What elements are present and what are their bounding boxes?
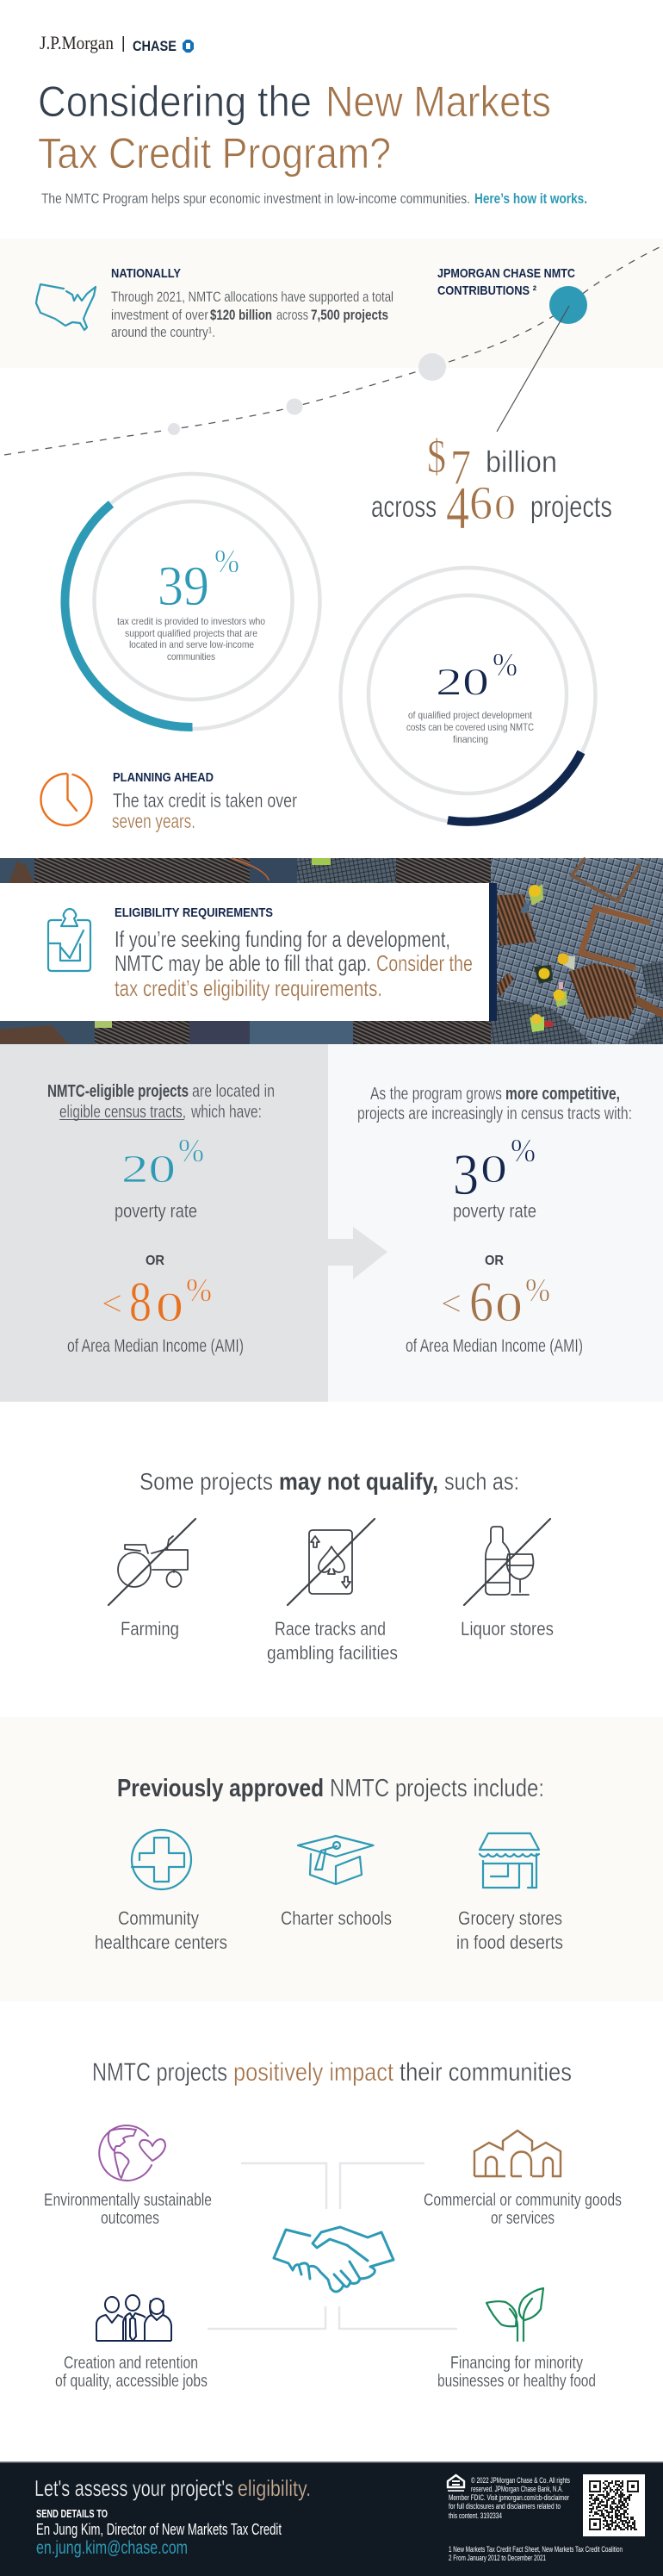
- item: financing for minority businesses: Financing for minority: [450, 2354, 583, 2373]
- item: race tracks and gambling: Race tracks and: [275, 1618, 386, 1640]
- text: legal disclaimer: this content. 3192334: [449, 2511, 502, 2521]
- text: eligible intro: eligible census tracts,: [59, 1103, 186, 1122]
- panel: NMTC-eligible projects: [0, 1044, 328, 1402]
- pointer line: [497, 306, 569, 432]
- logo: J.P.Morgan and Chase: CHASE: [133, 38, 177, 54]
- text: contact details: en.jung.kim@chase.com: [36, 2538, 188, 2558]
- text: nationally: Through 2021, NMTC allocations have supported a total: [111, 289, 393, 305]
- item: financing for minority businesses: businesses or healthy food: [437, 2372, 596, 2391]
- chart: 39 percent ring: support qualified projects that are: [125, 627, 257, 639]
- heading: eligibility requirements: ELIGIBILITY REQUIREMENTS: [115, 905, 273, 920]
- icon: clock: [40, 774, 91, 825]
- panel: more competitive projects: [328, 1044, 663, 1402]
- item: community healthcare: healthcare centers: [95, 1932, 227, 1953]
- icon: three people: [96, 2295, 171, 2341]
- growth markers: [168, 286, 587, 435]
- logo: J.P.Morgan and Chase: J.P.Morgan: [40, 32, 114, 53]
- icon: clipboard: [48, 909, 90, 971]
- panel: NMTC-eligible projects: OR: [146, 1254, 164, 1268]
- heading: JPMorgan Chase contributions: [437, 266, 575, 298]
- text: eligibility body: NMTC may be able to fill that gap.: [115, 950, 371, 976]
- chart: 20 percent ring: [341, 568, 596, 823]
- chart: 39 percent ring: located in and serve low-income: [129, 638, 254, 650]
- icon: tractor struck through: [108, 1519, 195, 1605]
- item: financing for minority businesses: [437, 2288, 596, 2391]
- logo: J.P.Morgan and Chase: [40, 32, 194, 54]
- item: grocery stores: [456, 1833, 563, 1953]
- stat: $7 billion across 460 projects: projects: [530, 490, 612, 524]
- panel: more competitive projects: OR: [485, 1254, 504, 1268]
- item: community healthcare: Community: [118, 1907, 199, 1929]
- arrow: [328, 1227, 387, 1279]
- item: charter schools: Charter schools: [281, 1907, 392, 1929]
- text: eligibility body: If you’re seeking funding for a development,: [115, 926, 450, 952]
- heading: may not qualify: Some projects: [139, 1468, 273, 1495]
- text: eligible intro: [47, 1082, 275, 1122]
- heading: previously approved: [117, 1775, 544, 1802]
- heading: previously approved: NMTC projects include:: [330, 1775, 544, 1802]
- stat: 30% poverty rate: poverty rate: [453, 1200, 536, 1222]
- text: nationally: NATIONALLY: [111, 266, 181, 281]
- text: competitive intro: As the program grows: [370, 1085, 502, 1104]
- heading: may not qualify: [139, 1468, 519, 1495]
- text: contact details: [36, 2508, 282, 2558]
- chart: 20 percent ring: costs can be covered using NMTC: [406, 721, 534, 733]
- icon: handshake: [274, 2227, 393, 2292]
- stat: $7 billion across 460 projects: 7: [450, 439, 471, 495]
- item: liquor stores: Liquor stores: [461, 1618, 554, 1640]
- text: legal disclaimer: reserved. JPMorgan Chase Bank, N.A.: [471, 2485, 563, 2494]
- chart: 20 percent ring: 20: [436, 661, 489, 703]
- text: eligibility body: tax credit’s eligibility requirements.: [115, 975, 382, 1001]
- stat: under 80% AMI: 8: [129, 1271, 152, 1334]
- chart: 39 percent ring: %: [214, 544, 239, 580]
- stat: 20% poverty rate: [115, 1133, 204, 1222]
- icon: US map: [36, 284, 96, 330]
- stat: 30% poverty rate: 3: [453, 1142, 479, 1207]
- text: competitive intro: more competitive,: [505, 1085, 620, 1104]
- stat: $7 billion across 460 projects: 6: [469, 476, 493, 529]
- stat: under 60% AMI: <: [441, 1285, 462, 1324]
- text: nationally: [111, 266, 393, 340]
- text: eligibility body: Consider the: [376, 950, 473, 976]
- item: race tracks and gambling: [267, 1519, 398, 1664]
- icon: graduation cap: [298, 1836, 374, 1884]
- text: planning ahead: The tax credit is taken over: [113, 789, 297, 812]
- stat: 20% poverty rate: %: [178, 1133, 204, 1169]
- icon: playing card struck through: [288, 1519, 375, 1605]
- title: Tax Credit Program?: [38, 129, 391, 177]
- chart: 20 percent ring: %: [493, 647, 517, 683]
- title: [38, 78, 551, 177]
- heading: previously approved: Previously approved: [117, 1775, 324, 1802]
- text: eligible intro: NMTC-eligible projects: [47, 1082, 189, 1101]
- text: nationally: $120 billion: [210, 308, 272, 323]
- heading: may not qualify: such as:: [444, 1468, 519, 1495]
- chart: 39 percent ring: [65, 474, 319, 729]
- text: nationally: investment of over: [111, 308, 208, 323]
- item: creation and retention of jobs: of quality, accessible jobs: [55, 2372, 208, 2391]
- text: eligible intro: which have:: [190, 1103, 262, 1122]
- text: planning ahead: [112, 770, 297, 832]
- stat: under 80% AMI: 0: [156, 1285, 183, 1330]
- item: farming: [108, 1519, 195, 1640]
- text: legal disclaimer: Member FDIC. Visit jpmorgan.com/cb-disclaimer: [449, 2493, 569, 2503]
- text: planning ahead: PLANNING AHEAD: [113, 770, 214, 785]
- stat: under 80% AMI: <: [102, 1285, 122, 1324]
- icon: globe and heart: [99, 2125, 165, 2181]
- item: charter schools: [281, 1836, 392, 1929]
- panel: eligibility requirements: [0, 883, 497, 1021]
- item: environmentally sustainable: [44, 2125, 212, 2228]
- panel: previously approved projects: [0, 1717, 663, 2001]
- stat: under 80% AMI: %: [186, 1272, 212, 1309]
- heading: JPMorgan Chase contributions: JPMORGAN CHASE NMTC: [437, 266, 575, 281]
- item: community healthcare: [95, 1830, 227, 1953]
- text: planning ahead: seven years.: [112, 810, 195, 832]
- text: contact details: En Jung Kim, Director of New Markets Tax Credit: [36, 2521, 282, 2538]
- item: commercial or community goods: or services: [491, 2209, 555, 2228]
- text: call to action: Let's assess your project's: [34, 2475, 233, 2501]
- text: legal disclaimer: [449, 2476, 570, 2521]
- item: environmentally sustainable: outcomes: [101, 2209, 159, 2228]
- stat: under 80% AMI: of Area Median Income (AMI): [67, 1336, 244, 1356]
- stat: $7 billion across 460 projects: billion: [486, 445, 557, 479]
- heading: positively impact: NMTC projects: [92, 2058, 227, 2087]
- chart: 39 percent ring: 39: [158, 555, 209, 618]
- text: call to action: eligibility.: [238, 2475, 311, 2501]
- chart: 39 percent ring: tax credit is provided to investors who: [117, 615, 265, 627]
- text: eligibility body: [115, 926, 473, 1001]
- stat: $7 billion across 460 projects: [371, 430, 612, 542]
- item: race tracks and gambling: gambling facilities: [267, 1642, 398, 1664]
- icon: plant: [486, 2288, 543, 2341]
- item: grocery stores: Grocery stores: [458, 1907, 562, 1929]
- text: contact details: SEND DETAILS TO: [36, 2508, 108, 2520]
- stat: 20% poverty rate: poverty rate: [115, 1200, 197, 1222]
- item: creation and retention of jobs: Creation and retention: [64, 2354, 198, 2373]
- heading: JPMorgan Chase contributions: CONTRIBUTIONS ²: [437, 283, 536, 298]
- item: environmentally sustainable: Environmentally sustainable: [44, 2191, 212, 2210]
- heading: positively impact: their communities: [400, 2058, 572, 2087]
- icon: QR code: [583, 2474, 645, 2536]
- stat: under 60% AMI: 6: [469, 1271, 493, 1334]
- heading: may not qualify: may not qualify,: [279, 1468, 438, 1495]
- text: footnotes: [449, 2545, 623, 2563]
- chart: 39 percent ring: communities: [167, 650, 215, 663]
- heading: positively impact: [92, 2058, 572, 2087]
- title: Considering the: [38, 78, 312, 126]
- text: nationally: across: [276, 308, 308, 323]
- stat: under 60% AMI: of Area Median Income (AMI): [406, 1336, 583, 1356]
- stat: 30% poverty rate: %: [511, 1133, 536, 1169]
- title: New Markets: [325, 78, 551, 126]
- intro text: The NMTC Program helps spur economic investment in low-income communities.: [41, 191, 470, 207]
- icon: storefront: [480, 1833, 539, 1888]
- stat: under 60% AMI: [406, 1271, 583, 1356]
- chart: 20 percent ring: financing: [453, 733, 488, 745]
- text: footnotes: 2 From January 2012 to December 2021: [449, 2554, 546, 2563]
- icon: equal housing lender: [448, 2475, 464, 2492]
- stat: 20% poverty rate: 20: [121, 1148, 176, 1191]
- icon: bottle and glass struck through: [464, 1519, 550, 1605]
- stat: $7 billion across 460 projects: 0: [494, 488, 516, 526]
- stat: under 60% AMI: 0: [495, 1285, 523, 1330]
- item: creation and retention of jobs: [55, 2295, 208, 2391]
- item: grocery stores: in food deserts: [456, 1932, 563, 1953]
- panel: footer: [0, 2461, 663, 2576]
- stat: 30% poverty rate: 0: [480, 1148, 507, 1191]
- heading: positively impact: positively impact: [233, 2058, 394, 2087]
- item: liquor stores: [461, 1519, 554, 1640]
- stat: 30% poverty rate: [453, 1133, 536, 1222]
- stat: $7 billion across 460 projects: 4: [446, 475, 469, 542]
- icon: medical cross: [132, 1830, 191, 1889]
- text: eligible intro: are located in: [192, 1082, 275, 1101]
- text: legal disclaimer: © 2022 JPMorgan Chase & Co. All rights: [471, 2476, 570, 2486]
- panel: nationally band: [0, 239, 663, 368]
- photo: construction workers on rebar: [0, 858, 663, 1044]
- stat: under 60% AMI: %: [525, 1272, 550, 1309]
- dashed growth curve: [4, 246, 663, 455]
- icon: buildings: [474, 2131, 561, 2176]
- text: nationally: 7,500 projects: [311, 308, 388, 323]
- intro text: Here’s how it works.: [474, 191, 587, 207]
- stat: $7 billion across 460 projects: across: [371, 490, 437, 524]
- text: legal disclaimer: for full disclosures and disclaimers related to: [449, 2502, 561, 2511]
- stat: under 80% AMI: [67, 1271, 244, 1356]
- chart: 20 percent ring: of qualified project development: [408, 709, 533, 721]
- item: commercial or community goods: [424, 2131, 622, 2228]
- text: nationally: around the country¹.: [111, 325, 215, 340]
- item: farming: Farming: [121, 1618, 179, 1640]
- stat: $7 billion across 460 projects: $: [427, 430, 446, 482]
- text: competitive intro: [357, 1085, 632, 1123]
